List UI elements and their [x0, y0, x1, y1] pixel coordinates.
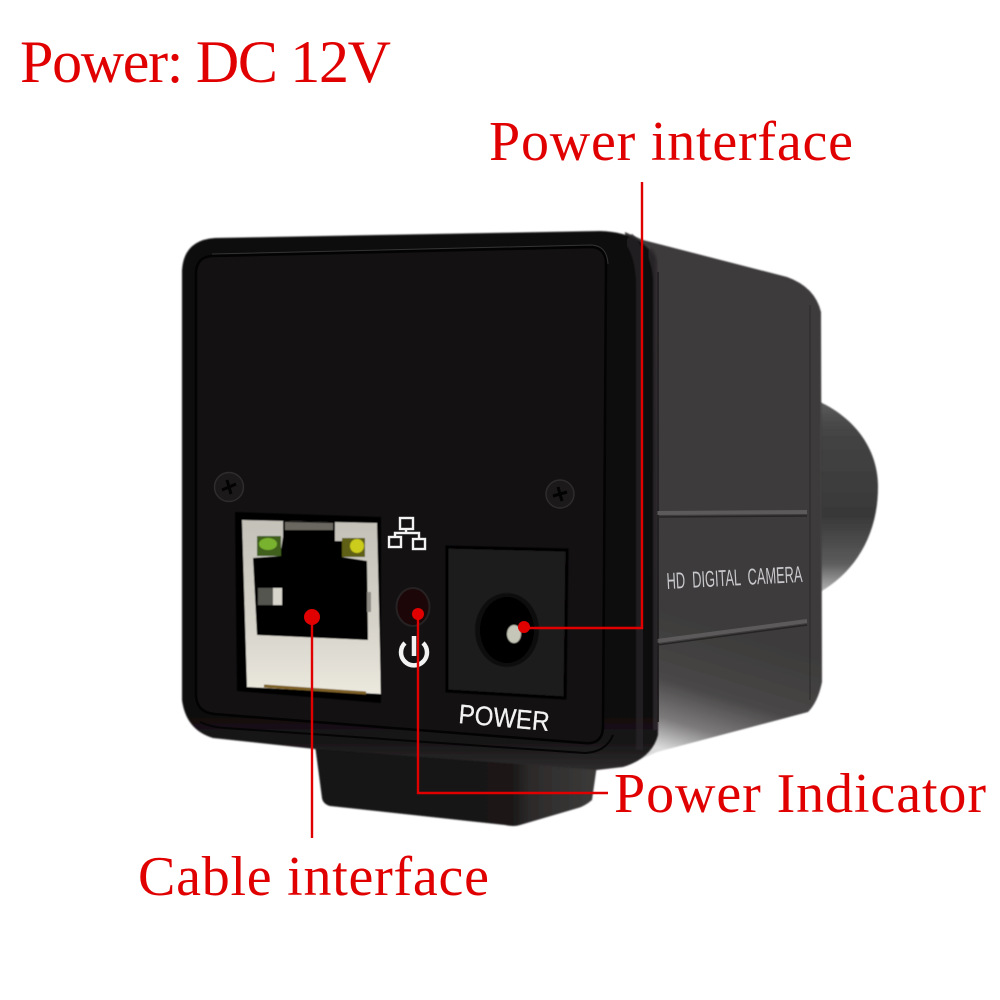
leader: power interface	[518, 182, 642, 633]
lens barrel	[820, 402, 878, 592]
camera rear face	[182, 231, 658, 770]
title: power spec: Power: DC 12V	[20, 29, 391, 95]
network icon	[389, 518, 425, 549]
leader: power indicator	[412, 608, 608, 793]
screw right	[546, 480, 574, 508]
label: power indicator: Power Indicator	[614, 763, 986, 825]
power symbol	[401, 636, 427, 665]
tripod mount	[315, 745, 597, 826]
power LED	[396, 588, 430, 626]
label: cable interface: Cable interface	[138, 846, 489, 908]
RJ45 ethernet port	[235, 512, 381, 703]
POWER label: POWER	[457, 699, 551, 737]
screw left	[214, 472, 244, 502]
DC jack panel	[447, 547, 567, 698]
side label: HD DIGITAL CAMERA	[666, 561, 803, 594]
camera side panel	[625, 232, 822, 766]
label: power interface: Power interface	[489, 111, 853, 173]
leader: cable interface	[304, 609, 320, 838]
